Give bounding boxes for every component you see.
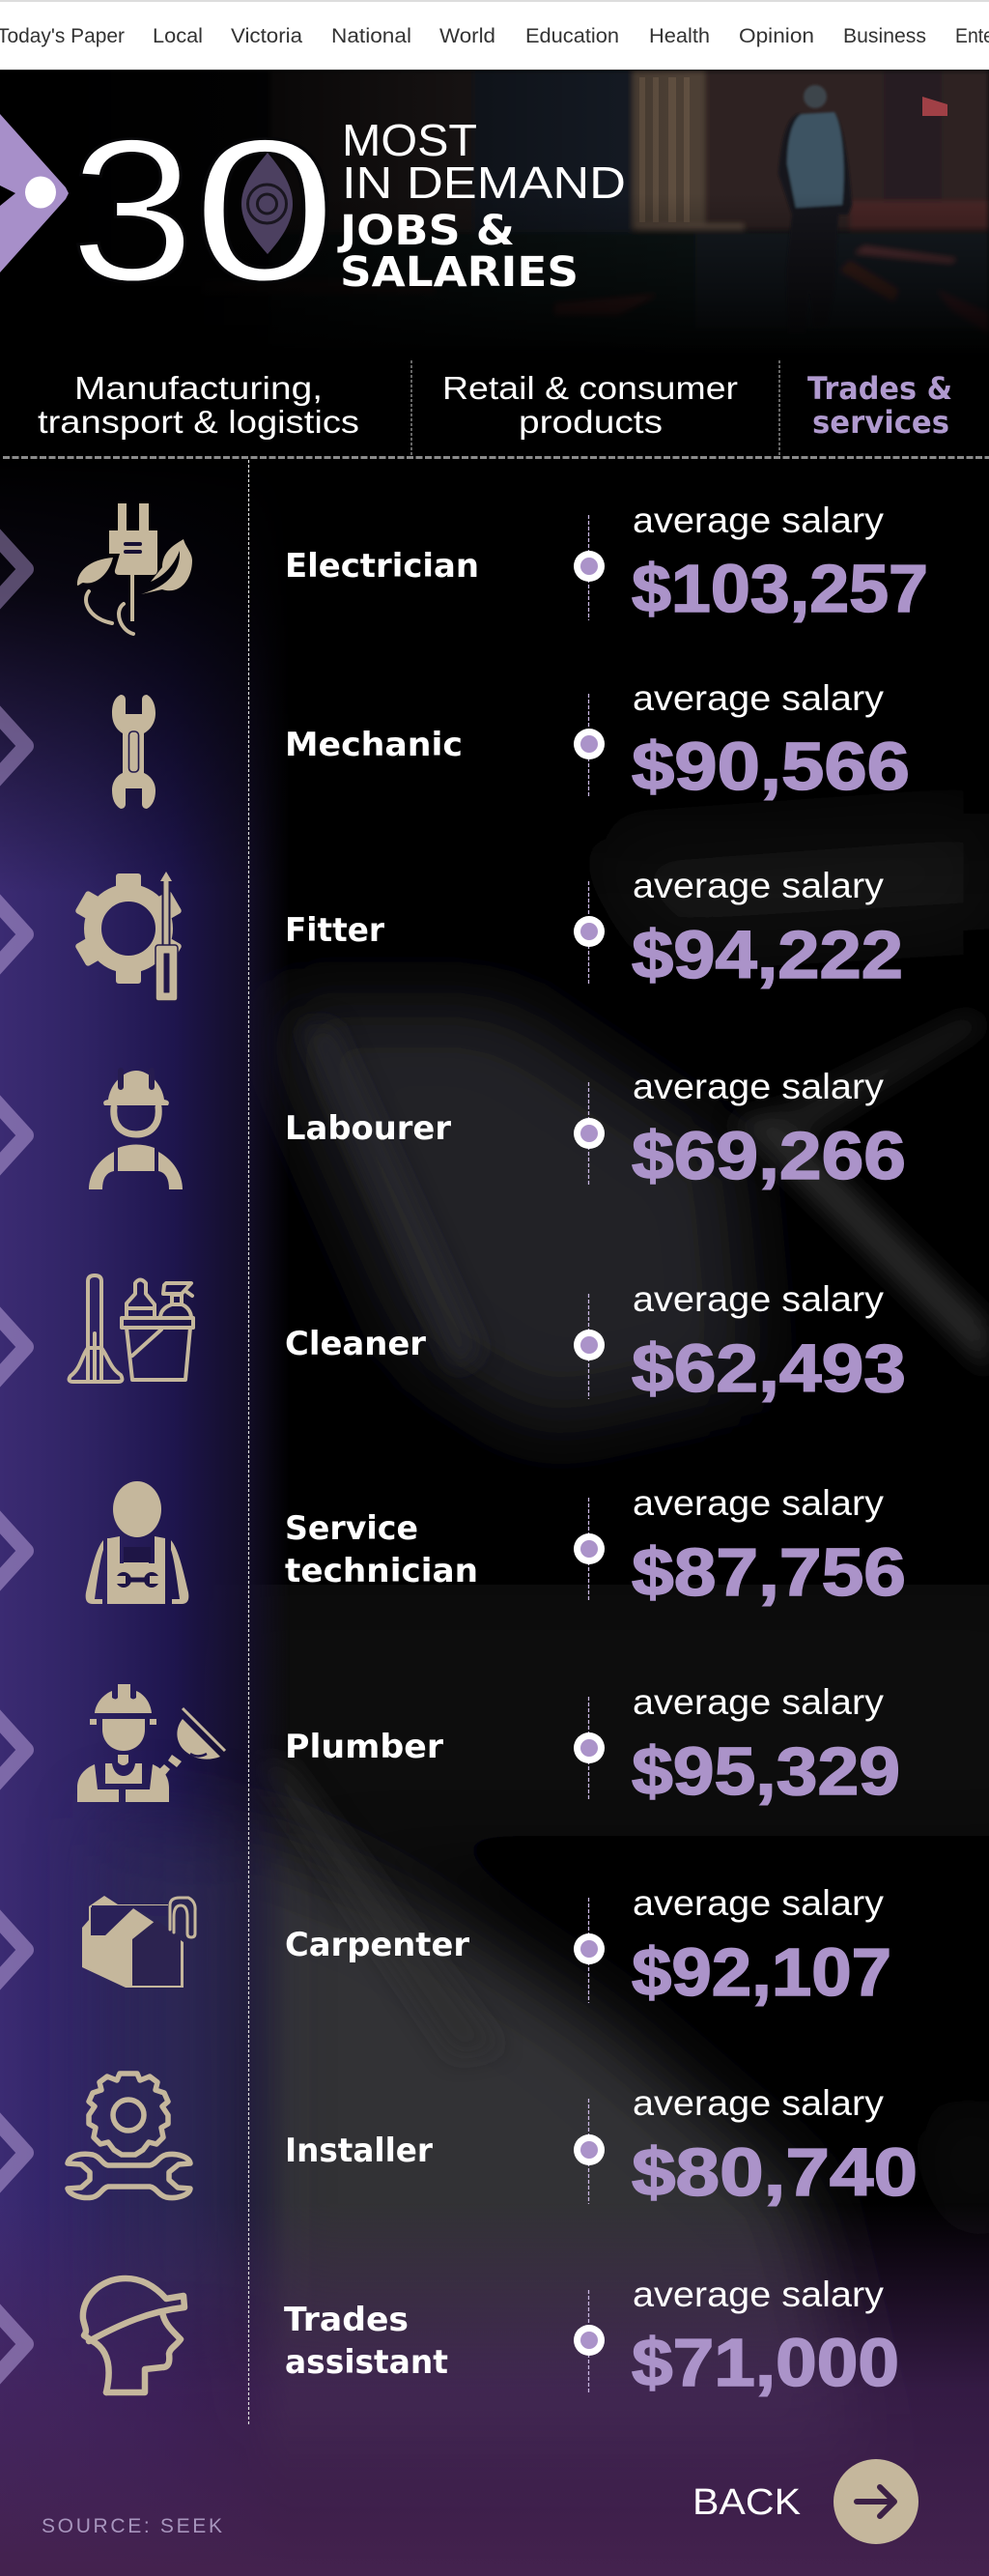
tab: manufacturing, transport and logistics: Manufacturing, xyxy=(74,370,323,406)
marker xyxy=(574,1898,605,2003)
job title: Fitter xyxy=(285,911,384,949)
salary: average salary xyxy=(633,2083,885,2123)
tab: retail and consumer products xyxy=(442,370,738,440)
tab: manufacturing, transport and logistics xyxy=(38,370,359,440)
job title: Mechanic xyxy=(285,726,463,763)
back button: BACK xyxy=(692,2482,801,2523)
tab: manufacturing, transport and logistics: transport & logistics xyxy=(38,404,359,440)
salary: $80,740 xyxy=(632,2134,918,2210)
salary: $62,493 xyxy=(632,1331,906,1406)
source note: SOURCE: SEEK xyxy=(42,2515,222,2537)
site navigation bar: Today's Paper xyxy=(0,25,125,47)
marker xyxy=(574,2099,605,2204)
number 30: 0 xyxy=(192,97,337,324)
salary: average salary xyxy=(633,1682,885,1722)
marker xyxy=(574,515,605,620)
salary: $94,222 xyxy=(632,917,903,992)
header photo: man walking through a dark corridor xyxy=(0,71,989,362)
heading text: IN DEMAND xyxy=(342,157,626,208)
salary: $71,000 xyxy=(632,2325,899,2400)
salary: $90,566 xyxy=(632,729,910,804)
icon: plumber with plunger xyxy=(77,1684,225,1802)
row: Installer xyxy=(0,2074,918,2210)
site navigation bar: Education xyxy=(525,25,619,47)
icon: gear and spanner xyxy=(68,2074,190,2198)
job title xyxy=(284,2301,448,2381)
icon: mop and bucket xyxy=(70,1275,193,1382)
chevron xyxy=(0,1907,26,1992)
site navigation bar xyxy=(0,0,989,71)
salary xyxy=(632,1883,891,2010)
site navigation bar: National xyxy=(331,25,411,47)
salary xyxy=(632,2275,899,2400)
row: Trades assistant xyxy=(0,2275,899,2400)
salary xyxy=(632,1483,906,1610)
heading text: SALARIES xyxy=(340,248,579,297)
chevron xyxy=(0,1707,26,1792)
job title: Installer xyxy=(285,2132,433,2169)
salary xyxy=(632,678,910,804)
marker xyxy=(574,1498,605,1602)
job title: Service xyxy=(285,1509,418,1547)
icon: gear and screwdriver xyxy=(74,872,183,1001)
salary: average salary xyxy=(633,501,885,540)
icon: wrench xyxy=(112,695,155,809)
icon: worker in hard hat xyxy=(89,1071,183,1189)
tab: retail and consumer products: Retail & consumer xyxy=(442,370,738,406)
icon: plug with leaves xyxy=(77,503,192,634)
heading text: MOST xyxy=(342,115,477,165)
salary: average salary xyxy=(633,678,885,718)
site navigation bar: Business xyxy=(843,25,926,47)
tab: trades and services, active xyxy=(807,370,952,441)
salary: $87,756 xyxy=(632,1534,906,1610)
chevron xyxy=(0,1304,26,1389)
salary xyxy=(632,1279,906,1406)
marker xyxy=(574,2290,605,2394)
title block xyxy=(0,97,626,324)
salary xyxy=(632,2083,918,2210)
job title: assistant xyxy=(285,2343,448,2381)
marker xyxy=(574,1697,605,1801)
salary: $103,257 xyxy=(632,551,928,626)
salary: $92,107 xyxy=(632,1934,891,2010)
chevron xyxy=(0,527,26,612)
salary xyxy=(632,1067,906,1193)
row: Carpenter xyxy=(0,1883,891,2010)
site navigation bar: Opinion xyxy=(739,25,814,47)
marker xyxy=(574,1294,605,1399)
salary: average salary xyxy=(633,1279,885,1319)
salary: $69,266 xyxy=(632,1118,906,1193)
salary: average salary xyxy=(633,1883,885,1923)
row: Electrician xyxy=(0,501,928,634)
chevron xyxy=(0,2110,26,2195)
tab: trades and services, active: Trades & xyxy=(807,370,952,407)
job title xyxy=(285,1509,478,1589)
heading text: JOBS & xyxy=(337,207,515,255)
row: Fitter xyxy=(0,866,903,1001)
number 30 xyxy=(70,97,337,324)
salary xyxy=(632,866,903,992)
salary: average salary xyxy=(633,2275,885,2314)
salary xyxy=(632,501,928,626)
marker xyxy=(574,1082,605,1187)
marker xyxy=(574,694,605,798)
icon: toolbox house xyxy=(82,1896,195,1988)
salary: average salary xyxy=(633,1067,885,1106)
chevron xyxy=(0,1093,26,1178)
icon: lavender tag with hole xyxy=(0,114,69,272)
tab: trades and services, active: services xyxy=(812,404,949,441)
job title: Trades xyxy=(284,2301,409,2338)
job title: Plumber xyxy=(285,1728,443,1765)
back button xyxy=(692,2459,918,2544)
row: Service technician xyxy=(0,1481,906,1610)
marker xyxy=(574,881,605,986)
row: Labourer xyxy=(0,1067,906,1193)
number 30: 3 xyxy=(70,97,195,324)
job title: Electrician xyxy=(285,547,479,585)
icon: worker in overalls with wrench xyxy=(86,1481,188,1604)
job title: Labourer xyxy=(285,1109,451,1147)
site navigation bar: Victoria xyxy=(231,25,302,47)
salary: average salary xyxy=(633,866,885,905)
salary: $95,329 xyxy=(632,1733,900,1809)
salary: average salary xyxy=(633,1483,885,1523)
chevron xyxy=(0,892,26,977)
heading text xyxy=(337,115,626,297)
icon: eye inside the zero xyxy=(241,153,293,254)
chevron xyxy=(0,703,26,788)
job title: technician xyxy=(285,1552,478,1589)
tab: retail and consumer products: products xyxy=(519,404,663,440)
job title: Cleaner xyxy=(285,1325,426,1362)
site navigation bar: World xyxy=(439,25,495,47)
site navigation bar: Local xyxy=(153,25,203,47)
chevron xyxy=(0,2302,26,2387)
icon: arrow in circle xyxy=(834,2459,918,2544)
row: Mechanic xyxy=(0,678,910,809)
icon: head with cap xyxy=(83,2278,184,2392)
row: Plumber xyxy=(0,1682,900,1809)
chevron xyxy=(0,1508,26,1593)
job title: Carpenter xyxy=(285,1926,469,1963)
category tabs xyxy=(3,360,989,2425)
salary xyxy=(632,1682,900,1809)
row: Cleaner xyxy=(0,1275,906,1406)
site navigation bar: Health xyxy=(649,25,710,47)
